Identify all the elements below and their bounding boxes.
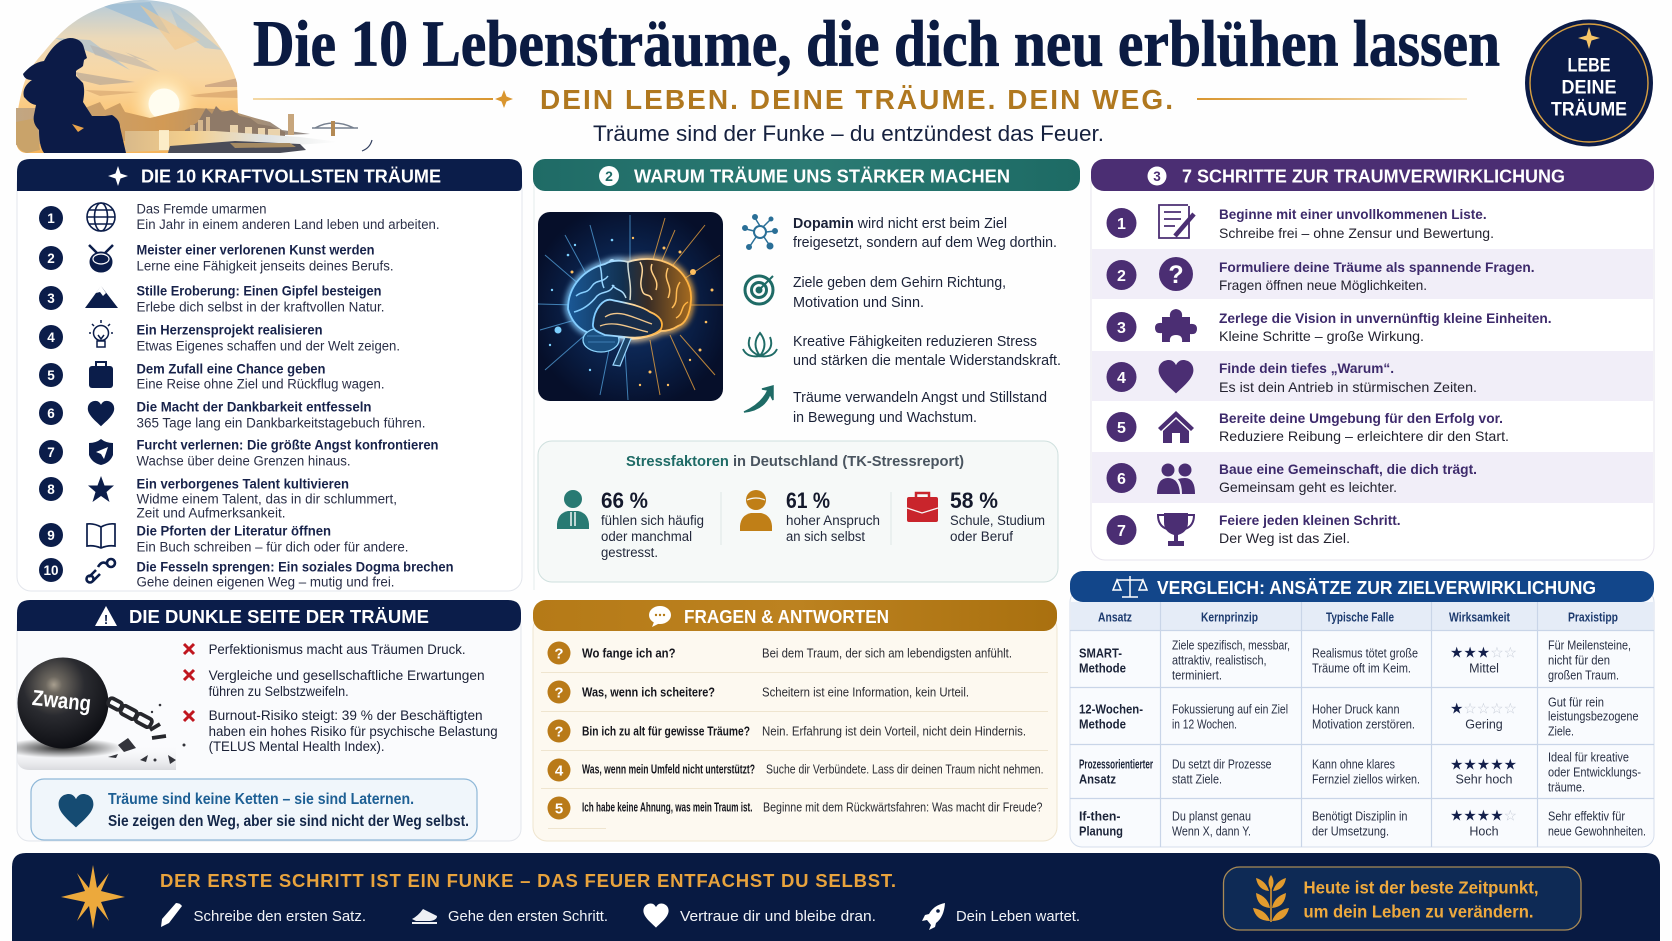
table row: 12-Wochen-Methode: Hoher Druck kann [1312, 702, 1400, 716]
panel: Vergleich der Ansätze (table) [1070, 571, 1654, 847]
table row: prozessorientierter Ansatz [1079, 750, 1641, 794]
illustration: iron ball and broken chain labelled Zwang: Zwang [31, 685, 92, 716]
dream list text: Meister einer verlorenen Kunst werden [136, 242, 374, 258]
header hero illustration: woman watching sunset [10, 0, 372, 155]
table row: If-then-Planung: ★★★★☆ [1450, 806, 1517, 824]
panel heading: ! [104, 612, 108, 627]
table row: If-then-Planung: If-then- [1079, 810, 1120, 824]
row dividers [541, 672, 1048, 828]
benefit statements: und stärken die mentale Widerstandskraft. [793, 353, 1061, 369]
icon: lotus [743, 333, 777, 356]
brain folds [574, 262, 688, 318]
table row: If-then-Planung: Sehr effektiv für [1548, 810, 1625, 824]
stat: 66 %: gestresst. [601, 545, 658, 560]
table row: SMART-Methode: SMART- [1079, 646, 1122, 660]
icon: growing plant [1253, 875, 1289, 922]
table grid [1070, 602, 1654, 847]
number badges: 2 [47, 251, 55, 266]
icon: light bulb [89, 320, 113, 347]
table row: SMART-Methode: Methode [1079, 662, 1126, 676]
table row: SMART-Methode: terminiert. [1172, 668, 1222, 682]
panel heading: 7 SCHRITTE ZUR TRAUMVERWIRKLICHUNG [1182, 166, 1565, 186]
icon: open book [87, 524, 115, 548]
icon: growth arrow [744, 386, 773, 412]
step text: Zerlege die Vision in unvernünftig kleine Einheiten. [1219, 310, 1552, 326]
illustration: iron ball and broken chain labelled Zwang [0, 658, 186, 770]
dream list text: Die Fesseln sprengen: Ein soziales Dogma brechen [136, 560, 454, 574]
stat: 61 % [740, 488, 880, 544]
stat: 61 %: hoher Anspruch [786, 513, 880, 528]
number badges: 6 [47, 406, 55, 421]
table row: 12-Wochen-Methode: Ziele. [1548, 724, 1574, 738]
questions: Wo fange ich an? [582, 646, 676, 660]
cerebellum and stem [613, 335, 632, 366]
table row: prozessorientierter Ansatz: Fernziel ziellos wirken. [1312, 772, 1420, 786]
number badges: 1 [47, 211, 55, 226]
panel heading: DIE DUNKLE SEITE DER TRÄUME [129, 606, 429, 627]
footer action: write [161, 903, 366, 927]
badge: Lebe deine Träume: TRÄUME [1551, 100, 1627, 120]
table row: prozessorientierter Ansatz: oder Entwicklungs- [1548, 766, 1641, 780]
table row: prozessorientierter Ansatz: Du setzt dir Prozesse [1172, 758, 1272, 772]
step text: Formuliere deine Träume als spannende Fragen. [1219, 259, 1535, 275]
question badges: ? [554, 646, 564, 662]
dream list text: Zeit und Aufmerksankeit. [136, 506, 286, 520]
footer banner [12, 853, 1660, 941]
step number badges [1106, 208, 1136, 545]
panel heading: 2 [605, 168, 613, 184]
dream list text: Dem Zufall eine Chance geben [136, 362, 326, 376]
dream list text: Wachse über deine Grenzen hinaus. [136, 454, 350, 468]
table row: If-then-Planung: Planung [1079, 824, 1123, 838]
dream list text: Erlebe dich selbst in der kraftvollen Natur. [136, 300, 384, 314]
dream list text: Eine Reise ohne Ziel und Rückflug wagen. [136, 376, 384, 392]
callout: Träume sind Laternen [31, 779, 477, 840]
water and foreground shore [125, 131, 340, 152]
table row: 12-Wochen-Methode: in 12 Wochen. [1172, 718, 1237, 732]
benefit statements: Motivation und Sinn. [793, 295, 924, 311]
panel: die dunkle Seite der Träume [0, 600, 521, 841]
table row: 12-Wochen-Methode: Motivation zerstören. [1312, 718, 1415, 732]
table column headings: Typische Falle [1326, 610, 1394, 624]
step text [1219, 206, 1552, 546]
icon: list and pencil [1159, 205, 1194, 238]
panel heading: FRAGEN & ANTWORTEN [684, 606, 889, 627]
icon: mountain [85, 286, 118, 308]
table row: If-then-Planung: Hoch [1469, 824, 1499, 838]
icon: house [1158, 411, 1194, 443]
distant mountains and coast [16, 102, 310, 145]
table row: prozessorientierter Ansatz: statt Ziele. [1172, 772, 1222, 786]
icon: heart [1159, 360, 1193, 393]
stress factors box [538, 441, 1058, 582]
benefit statements: in Bewegung und Wachstum. [793, 410, 977, 426]
title: Die 10 Lebensträume, die dich neu erblühen lassen [253, 8, 1500, 80]
stat: 66 % [557, 488, 704, 560]
table row: SMART-Methode: Realismus tötet große [1312, 646, 1418, 660]
stat: 58 %: oder Beruf [950, 529, 1013, 544]
table row: 12-Wochen-Methode [1079, 696, 1639, 738]
answers: Nein. Erfahrung ist dein Vorteil, nicht dein Hindernis. [762, 724, 1026, 738]
table row: SMART-Methode [1079, 638, 1631, 682]
panel heading [533, 600, 1057, 631]
step number badges: 1 [1117, 216, 1126, 233]
table row: SMART-Methode: Für Meilensteine, [1548, 638, 1631, 652]
table row: If-then-Planung: der Umsetzung. [1312, 824, 1389, 838]
benefit statements [793, 216, 1061, 426]
step text: Feiere jeden kleinen Schritt. [1219, 512, 1401, 528]
table row: SMART-Methode: attraktiv, realistisch, [1172, 654, 1266, 668]
dream list text: Gehe deinen eigenen Weg – mutig und frei. [136, 574, 394, 590]
footer action: rocket [922, 903, 1080, 930]
stat: 58 %: 58 % [950, 488, 998, 513]
step number badges: 6 [1117, 471, 1126, 488]
table row: 12-Wochen-Methode: Methode [1079, 718, 1126, 732]
warning list with red crosses: Perfektionismus macht aus Träumen Druck. [209, 641, 466, 657]
callout: Heute ist der beste Zeitpunkt [1224, 867, 1581, 930]
table row: If-then-Planung: neue Gewohnheiten. [1548, 824, 1646, 838]
dream list text: Die Macht der Dankbarkeit entfesseln [136, 400, 372, 414]
badge: Lebe deine Träume: DEINE [1562, 78, 1616, 98]
icon: trophy [1158, 513, 1194, 546]
table row: SMART-Methode: großen Traum. [1548, 668, 1619, 682]
badge: Lebe deine Träume: LEBE [1568, 56, 1610, 76]
tagline: Träume sind der Funke – du entzündest das Feuer. [593, 121, 1104, 146]
step text: Fragen öffnen neue Möglichkeiten. [1219, 277, 1427, 293]
dream list text: Stille Eroberung: Einen Gipfel besteigen [136, 284, 382, 298]
table row: If-then-Planung: Wenn X, dann Y. [1172, 824, 1251, 838]
footer action: write: Schreibe den ersten Satz. [194, 908, 366, 925]
table row: If-then-Planung [1079, 806, 1646, 838]
icon: question mark: ? [1168, 261, 1184, 289]
table column headings: Ansatz [1098, 610, 1132, 624]
stat: 66 %: oder manchmal [601, 529, 692, 544]
table column headings [1098, 610, 1618, 624]
table row: prozessorientierter Ansatz: Ideal für kreative [1548, 750, 1629, 764]
step number badges: 2 [1117, 268, 1126, 285]
step number badges: 4 [1117, 370, 1126, 387]
footer heading: DER ERSTE SCHRITT IST EIN FUNKE – DAS FEUER ENTFACHST DU SELBST. [160, 870, 896, 891]
step text: Baue eine Gemeinschaft, die dich trägt. [1219, 461, 1477, 477]
number badges: 3 [47, 291, 55, 306]
badge: Lebe deine Träume [1525, 20, 1653, 146]
callout: Heute ist der beste Zeitpunkt: um dein Leben zu verändern. [1304, 902, 1534, 922]
benefit statements: Ziele geben dem Gehirn Richtung, [793, 275, 1006, 291]
dream list text: Das Fremde umarmen [136, 202, 266, 216]
answers [762, 646, 1044, 814]
panel heading [1070, 571, 1654, 602]
icon: shield [89, 439, 113, 465]
warning list with red crosses: führen zu Selbstzweifeln. [209, 683, 349, 699]
questions: Ich habe keine Ahnung, was mein Traum ist. [582, 800, 752, 814]
step text: Gemeinsam geht es leichter. [1219, 479, 1397, 495]
table row: If-then-Planung: Du planst genau [1172, 810, 1251, 824]
icon: puzzle piece [1155, 309, 1197, 342]
table row: prozessorientierter Ansatz: ★★★★★ [1450, 756, 1517, 774]
dream list text: Ein Herzensprojekt realisieren [136, 322, 322, 338]
stat: 66 %: 66 % [601, 488, 648, 513]
table row: 12-Wochen-Methode: leistungsbezogene [1548, 710, 1639, 724]
number badges: 5 [47, 368, 55, 383]
temporal lobe [593, 300, 662, 338]
table row: 12-Wochen-Methode: Gering [1465, 718, 1503, 732]
table head background [1071, 602, 1653, 630]
table row: SMART-Methode: nicht für den [1548, 654, 1610, 668]
benefit statements: Dopamin wird nicht erst beim Ziel [793, 216, 1007, 232]
panel heading: VERGLEICH: ANSÄTZE ZUR ZIELVERWIRKLICHUNG [1157, 577, 1596, 598]
dream list text: Ein Buch schreiben – für dich oder für andere. [136, 540, 408, 554]
icon: globe [87, 203, 115, 231]
icon: heart [88, 401, 114, 426]
questions: Bin ich zu alt für gewisse Träume? [582, 724, 750, 738]
question badges: 4 [555, 762, 564, 780]
number badges: 8 [47, 482, 55, 497]
dream list text: Widme einem Talent, das in dir schlummert, [136, 492, 397, 506]
warning list with red crosses: Vergleiche und gesellschaftliche Erwartungen [209, 667, 485, 683]
panel: 7 Schritte zur Traumverwirklichung [1091, 159, 1654, 560]
table row: If-then-Planung: Benötigt Disziplin in [1312, 810, 1408, 824]
icon: drum [89, 245, 113, 272]
panel heading: DIE 10 KRAFTVOLLSTEN TRÄUME [141, 166, 441, 186]
table row: 12-Wochen-Methode: Gut für rein [1548, 696, 1604, 710]
woman silhouette [23, 38, 126, 153]
panel: die 10 kraftvollsten Träume [17, 159, 522, 591]
benefit statements: Kreative Fähigkeiten reduzieren Stress [793, 334, 1037, 350]
step text: Beginne mit einer unvollkommenen Liste. [1219, 206, 1487, 222]
answers: Bei dem Traum, der sich am lebendigsten anfühlt. [762, 646, 1012, 660]
table row: 12-Wochen-Methode: 12-Wochen- [1079, 702, 1143, 716]
question badges [548, 642, 570, 820]
table row: prozessorientierter Ansatz: träume. [1548, 780, 1585, 794]
question badges: ? [554, 684, 564, 702]
stat: 58 % [907, 488, 1045, 544]
answers: Beginne mit dem Rückwärtsfahren: Was macht dir Freude? [763, 800, 1043, 814]
stat: 58 %: Schule, Studium [950, 513, 1045, 528]
answers: Scheitern ist eine Information, kein Urteil. [762, 686, 969, 700]
icon: golden spark [61, 865, 125, 929]
city skyline [185, 106, 358, 140]
step text: Schreibe frei – ohne Zensur und Bewertung. [1219, 225, 1494, 241]
step number badges: 3 [1117, 320, 1126, 337]
benefit statements: freigesetzt, sondern auf dem Weg dorthin. [793, 235, 1057, 251]
step text: Es ist dein Antrieb in stürmischen Zeiten. [1219, 379, 1477, 395]
table column headings: Praxistipp [1568, 610, 1618, 624]
table column headings: Kernprinzip [1201, 610, 1258, 624]
row bands [1092, 249, 1653, 503]
panel heading: 3 [1153, 169, 1161, 184]
answers: Suche dir Verbündete. Lass dir deinen Traum nicht nehmen. [766, 762, 1044, 776]
dream list text: Furcht verlernen: Die größte Angst konfrontieren [136, 438, 438, 452]
warning list with red crosses [184, 641, 498, 754]
table row: prozessorientierter Ansatz: Kann ohne klares [1312, 758, 1395, 772]
dream list text: Lerne eine Fähigkeit jenseits deines Berufs. [136, 258, 394, 274]
dream list text: Etwas Eigenes schaffen und der Welt zeigen. [136, 338, 400, 354]
benefit statements: Träume verwandeln Angst und Stillstand [793, 390, 1047, 406]
dream list text: Ein verborgenes Talent kultivieren [136, 476, 349, 492]
table column headings: Wirksamkeit [1449, 610, 1511, 624]
panel: warum Träume uns stärker machen [533, 159, 1080, 590]
warning list with red crosses: haben ein hohes Risiko für psychische Belastung [209, 723, 498, 739]
icon: star [88, 476, 114, 502]
stress factors box: Stressfaktoren in Deutschland (TK-Stressreport) [626, 454, 964, 470]
panel heading [1091, 159, 1654, 191]
icon: molecule [742, 214, 778, 250]
number badges [39, 206, 63, 582]
dream list text: Die Pforten der Literatur öffnen [136, 524, 331, 538]
dream list text: 365 Tage lang ein Dankbarkeitstagebuch führen. [136, 416, 426, 430]
icon: suitcase [89, 362, 113, 388]
icon: people [1157, 464, 1195, 494]
number badges: 7 [47, 445, 55, 460]
stat: 66 %: fühlen sich häufig [601, 513, 704, 528]
table row: SMART-Methode: ★★★☆☆ [1450, 644, 1517, 662]
step text: Der Weg ist das Ziel. [1219, 530, 1350, 546]
warning list with red crosses: Burnout-Risiko steigt: 39 % der Beschäftigten [209, 707, 483, 723]
footer action: trust: Vertraue dir und bleibe dran. [680, 908, 876, 925]
glowing brain illustration [538, 212, 723, 401]
icon: broken chain [86, 559, 115, 582]
question badges: 5 [555, 800, 563, 818]
table row: SMART-Methode: Ziele spezifisch, messbar, [1172, 638, 1290, 652]
step text: Bereite deine Umgebung für den Erfolg vor. [1219, 410, 1503, 426]
dream list text [136, 202, 454, 590]
footer action: step: Gehe den ersten Schritt. [448, 908, 608, 925]
table row: prozessorientierter Ansatz: Sehr hoch [1456, 772, 1513, 786]
question badges: ? [554, 724, 564, 740]
panel heading [17, 600, 521, 631]
panel heading: WARUM TRÄUME UNS STÄRKER MACHEN [634, 166, 1010, 186]
icon: target [745, 276, 773, 304]
panel: Fragen und Antworten [533, 600, 1057, 841]
brain body [568, 259, 691, 339]
callout: Heute ist der beste Zeitpunkt: Heute ist der beste Zeitpunkt, [1304, 878, 1538, 898]
questions [582, 646, 755, 814]
panel heading [17, 159, 522, 191]
table row: prozessorientierter Ansatz: Ansatz [1079, 772, 1116, 786]
step text: Reduziere Reibung – erleichtere dir den Start. [1219, 428, 1509, 444]
number badges: 9 [47, 528, 55, 543]
stat: 61 %: an sich selbst [786, 529, 865, 544]
step number badges: 5 [1117, 420, 1126, 437]
callout: Träume sind Laternen: Träume sind keine Ketten – sie sind Laternen. [108, 791, 414, 808]
warning list with red crosses: (TELUS Mental Health Index). [209, 738, 385, 754]
step number badges: 7 [1117, 523, 1126, 540]
footer action: rocket: Dein Leben wartet. [956, 908, 1080, 925]
step text: Kleine Schritte – große Wirkung. [1219, 328, 1424, 344]
questions: Was, wenn mein Umfeld nicht unterstützt? [582, 762, 755, 776]
dream list text: Ein Jahr in einem anderen Land leben und arbeiten. [136, 217, 440, 232]
table row: 12-Wochen-Methode: ★☆☆☆☆ [1450, 700, 1517, 718]
table row: prozessorientierter Ansatz: Prozessorientierter [1079, 758, 1153, 772]
number badges: 10 [43, 563, 59, 578]
callout: Träume sind Laternen: Sie zeigen den Weg, aber sie sind nicht der Weg selbst. [108, 813, 469, 830]
number badges: 4 [47, 330, 55, 345]
footer action: trust [643, 903, 876, 928]
step text: Finde dein tiefes „Warum“. [1219, 360, 1394, 376]
table row: SMART-Methode: Mittel [1469, 662, 1499, 676]
questions: Was, wenn ich scheitere? [582, 686, 715, 700]
icon: question mark [1159, 257, 1193, 291]
table row: 12-Wochen-Methode: Fokussierung auf ein Ziel [1172, 702, 1288, 716]
table row: SMART-Methode: Träume oft im Keim. [1312, 662, 1411, 676]
panel heading [533, 159, 1080, 191]
subtitle with decorative lines: DEIN LEBEN. DEINE TRÄUME. DEIN WEG. [540, 84, 1173, 115]
subtitle with decorative lines [253, 84, 1467, 115]
brain glow [568, 259, 691, 339]
stat: 61 %: 61 % [786, 488, 830, 513]
